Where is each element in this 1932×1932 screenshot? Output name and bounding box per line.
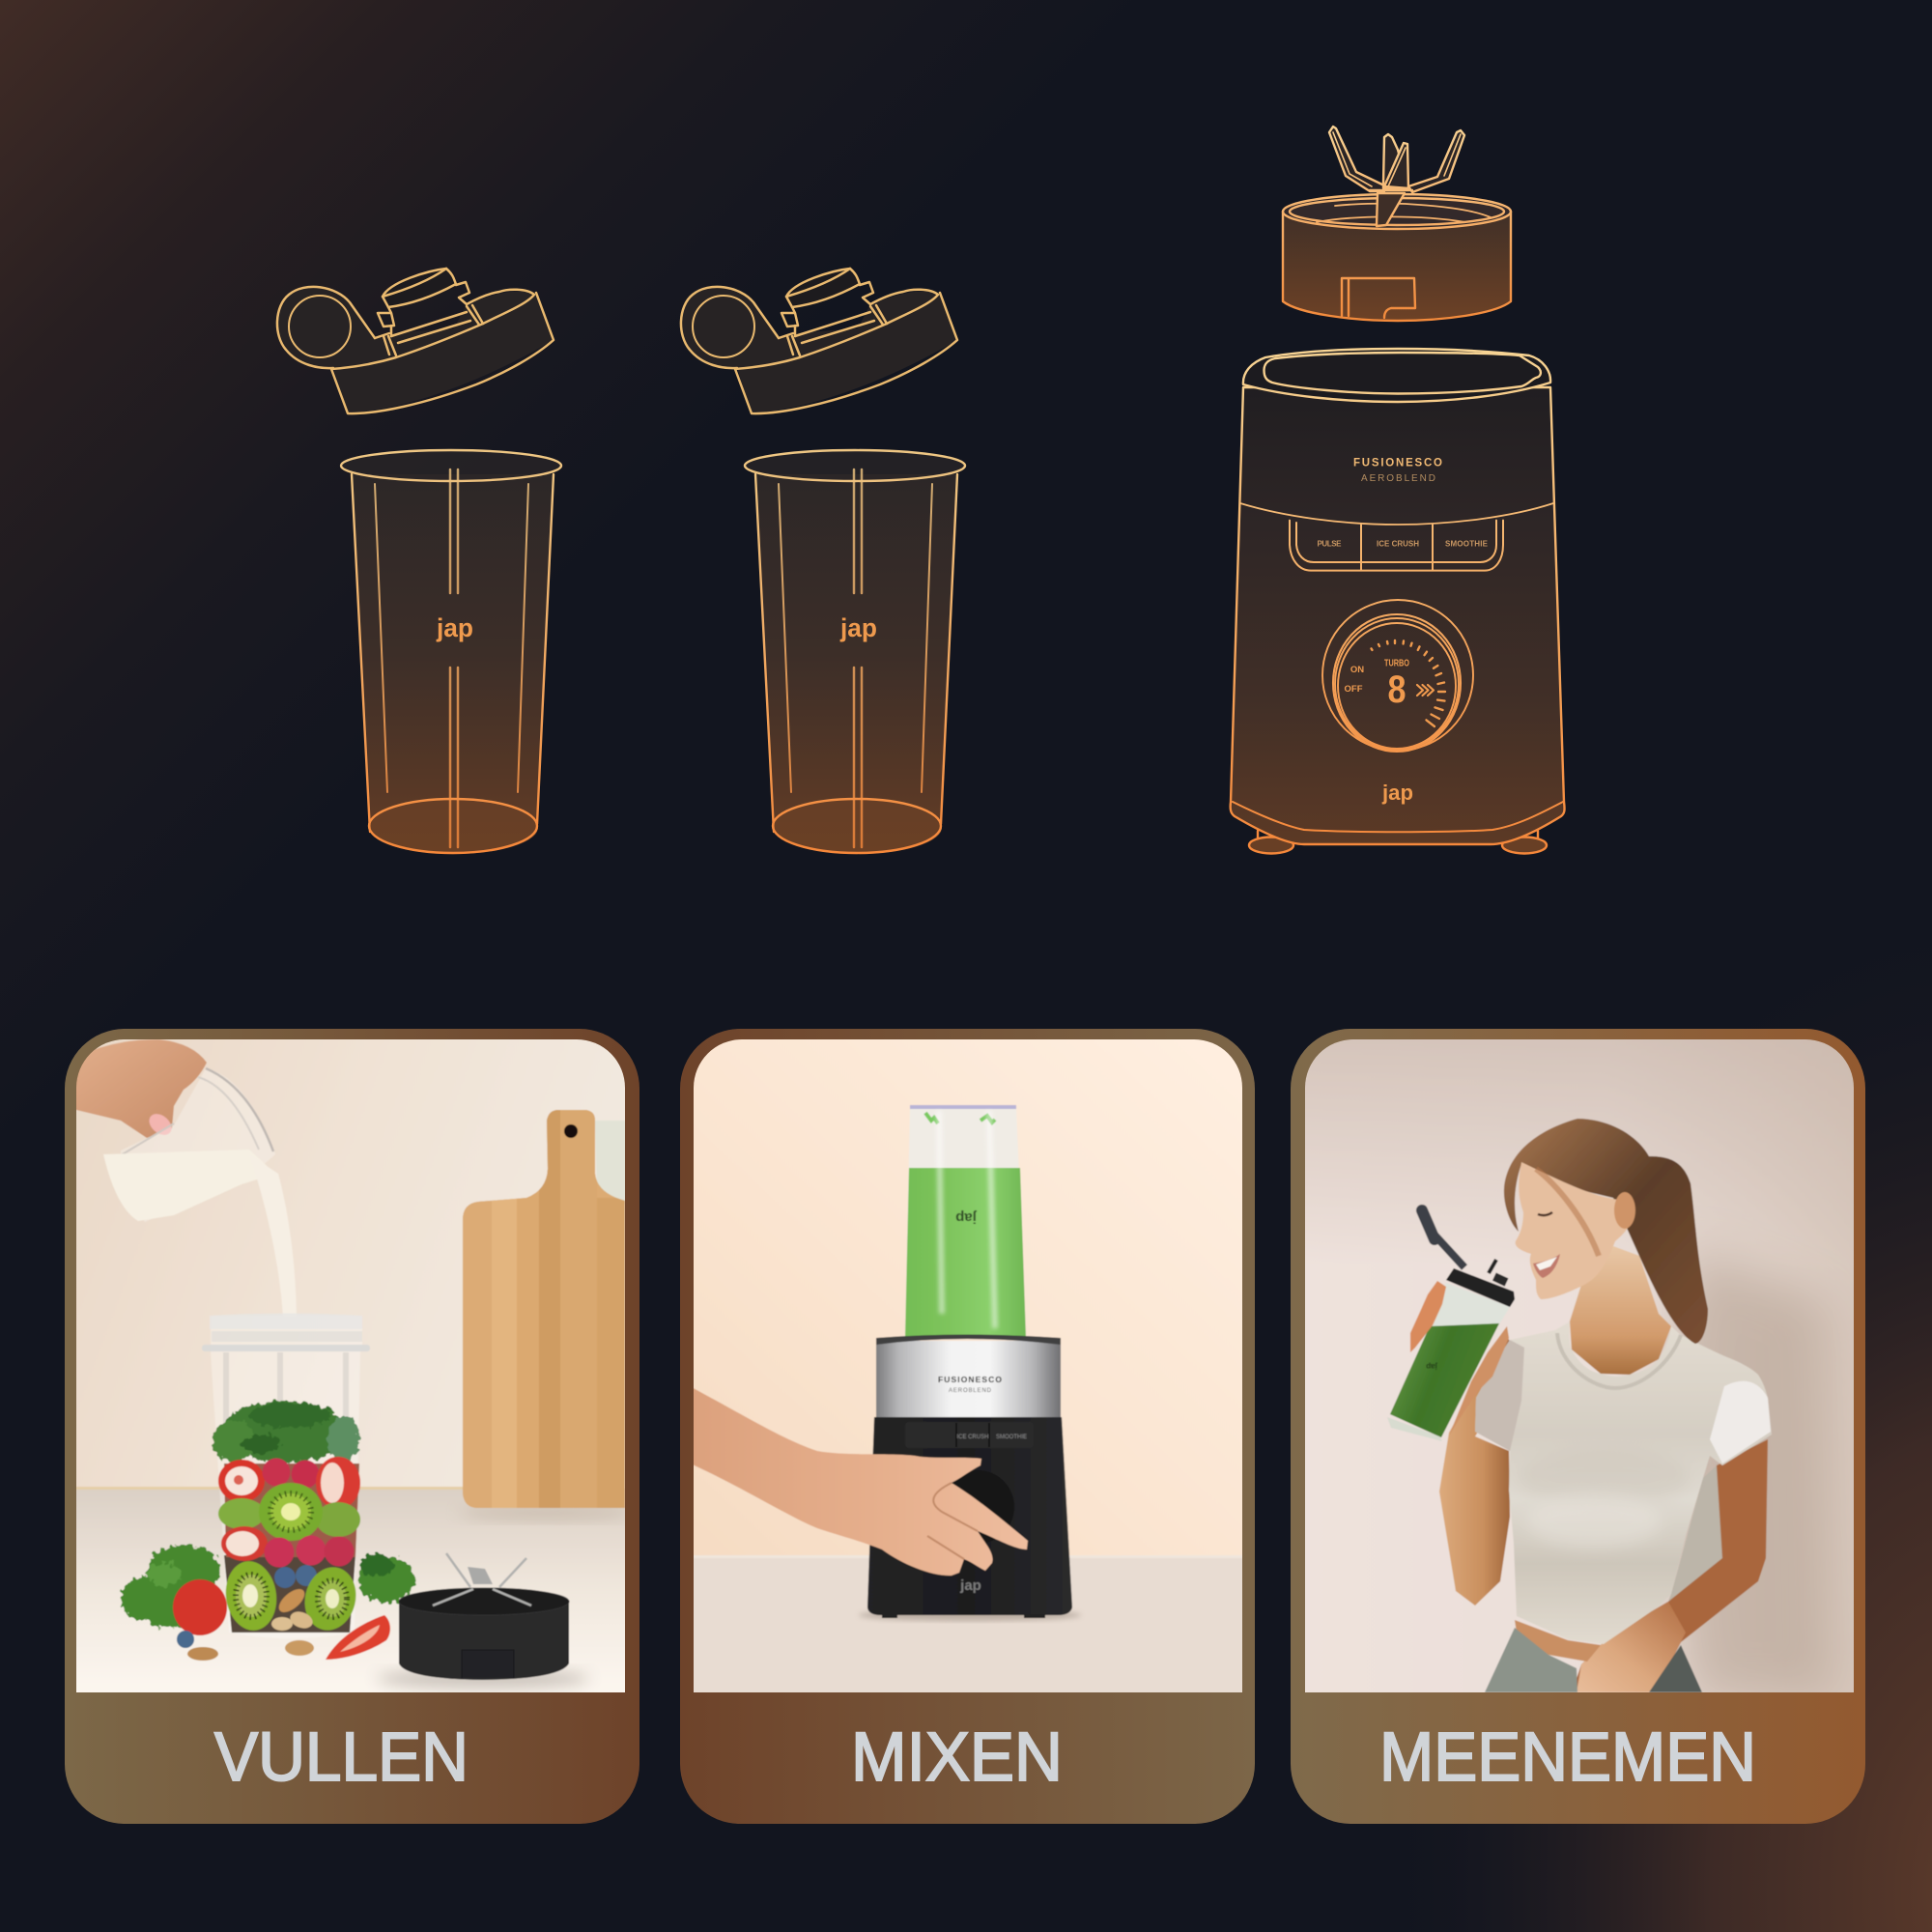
panel: blender base line drawing [1231, 349, 1565, 854]
woman body [1439, 1246, 1772, 1692]
blender base: jap [959, 1577, 981, 1594]
blender base [867, 1335, 1072, 1618]
blade unit black [377, 1553, 589, 1689]
outside kale [121, 1545, 415, 1629]
holding hand [1410, 1281, 1446, 1352]
cup logo: jap [839, 613, 877, 642]
base logo: jap [1381, 781, 1413, 805]
photo: blending [686, 1034, 1251, 1700]
strawberries and raspberries [218, 1457, 360, 1509]
preset buttons [1290, 521, 1503, 571]
card: VULLEN [65, 1029, 639, 1824]
hand [72, 1039, 207, 1138]
pink fingernail [149, 1113, 172, 1135]
brand text [1353, 458, 1442, 484]
cutting board [462, 1109, 625, 1509]
panel: first cup and lid line drawing [277, 269, 561, 854]
label: VULLEN: VULLEN [214, 1719, 469, 1796]
card: MIXEN [680, 1029, 1255, 1824]
blender base: SMOOTHIE [996, 1435, 1027, 1440]
brand text: FUSIONESCO [1353, 458, 1442, 469]
panel: blade unit line drawing [1283, 127, 1511, 321]
face [1516, 1162, 1635, 1299]
jar [202, 1314, 370, 1638]
bottom kiwis and almonds [225, 1560, 356, 1632]
smoothie cup: jap [955, 1209, 978, 1226]
photo: woman drinking smoothie [1299, 1034, 1860, 1700]
body [1231, 349, 1565, 844]
milk stream [257, 1170, 297, 1314]
blender base: FUSIONESCO [938, 1375, 1002, 1384]
hair [1504, 1119, 1708, 1344]
glass of milk [103, 1068, 275, 1222]
control dial: TURBO [1384, 659, 1409, 668]
preset buttons: PULSE [1318, 539, 1342, 549]
brand text: AEROBLEND [1361, 473, 1435, 484]
card: MEENEMEN [1291, 1029, 1865, 1824]
second fruit layer [221, 1526, 354, 1588]
t-shirt [1475, 1321, 1772, 1644]
control dial: 8 [1387, 668, 1406, 711]
smoothie cup [905, 1105, 1026, 1338]
bottle [1387, 1210, 1515, 1441]
control dial [1322, 600, 1473, 752]
control dial: ON [1350, 665, 1364, 675]
feet [1249, 831, 1547, 854]
kiwi layer [218, 1483, 360, 1541]
panel: second cup and lid line drawing [681, 269, 965, 854]
cup logo: jap [436, 613, 473, 642]
blender base: AEROBLEND [949, 1388, 992, 1394]
preset buttons: ICE CRUSH [1377, 539, 1419, 549]
blender base: ICE CRUSH [956, 1435, 989, 1440]
cup body [341, 450, 561, 854]
photo: filling the cup [68, 1034, 638, 1701]
loose fruit [173, 1579, 390, 1661]
bottle: jap [1426, 1362, 1438, 1371]
label: MEENEMEN: MEENEMEN [1379, 1719, 1756, 1796]
lid outline [681, 269, 957, 413]
arm and hand [688, 1385, 1028, 1576]
lid outline [277, 269, 554, 413]
cup body [745, 450, 965, 854]
control dial: OFF [1345, 684, 1363, 695]
label: MIXEN: MIXEN [851, 1719, 1063, 1796]
preset buttons: SMOOTHIE [1445, 539, 1489, 549]
kale in jar [213, 1401, 359, 1463]
